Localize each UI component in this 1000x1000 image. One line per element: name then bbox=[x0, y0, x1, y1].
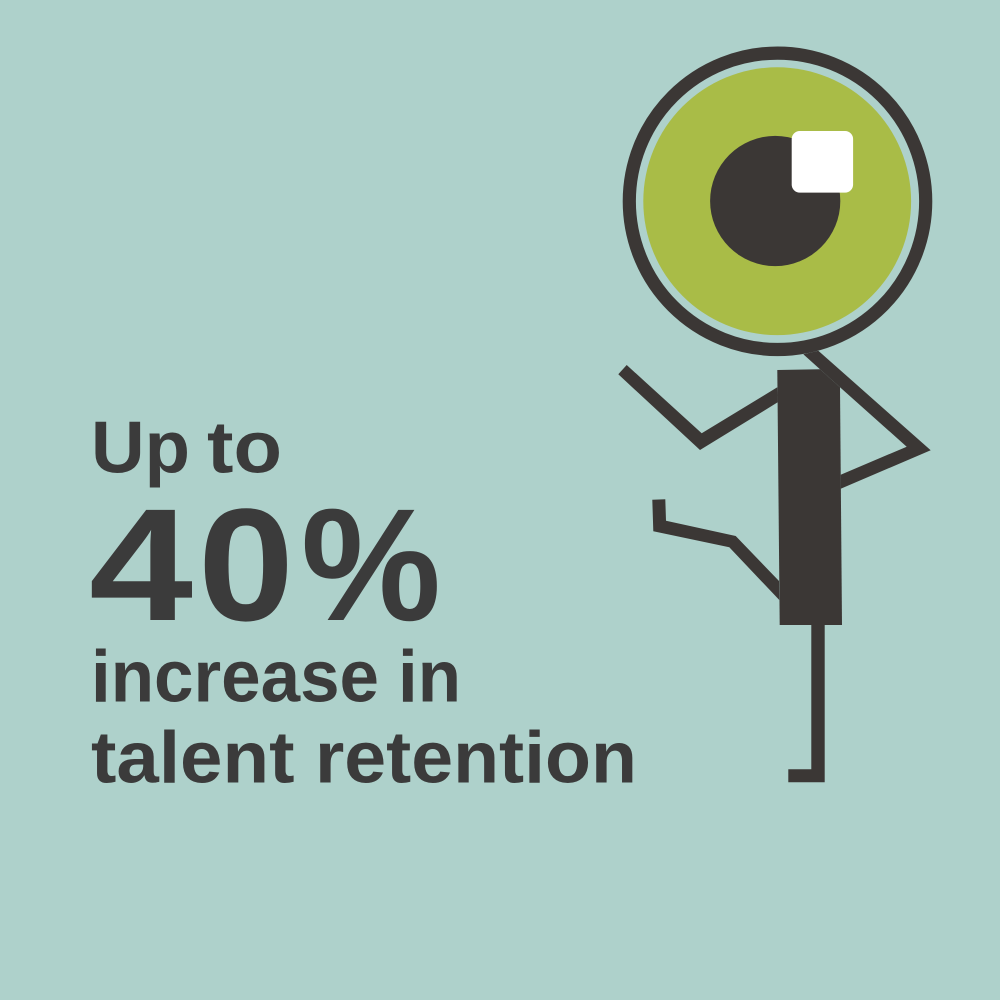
torso bbox=[777, 369, 842, 625]
icon: eye head bbox=[629, 53, 926, 350]
text: increase in: in bbox=[398, 636, 461, 718]
text: 40%: % bbox=[301, 475, 441, 654]
text: 40%: 0 bbox=[198, 475, 294, 654]
headline text bbox=[89, 408, 637, 798]
figure: eye-headed stick character bbox=[618, 53, 931, 782]
left arm bbox=[618, 365, 778, 450]
text: Up to bbox=[91, 408, 282, 488]
text: increase in: increase bbox=[91, 636, 379, 718]
raised leg bbox=[652, 499, 779, 600]
text: 40%: 4 bbox=[89, 475, 193, 654]
text: 40% bbox=[89, 475, 441, 654]
text: Up to: Up bbox=[91, 408, 190, 488]
text: Up to: to bbox=[207, 408, 282, 488]
right arm bbox=[803, 351, 931, 489]
standing leg bbox=[788, 625, 825, 782]
text: talent retention bbox=[91, 718, 637, 798]
text: talent retention: talent bbox=[91, 718, 294, 798]
text: talent retention: retention bbox=[315, 718, 637, 798]
